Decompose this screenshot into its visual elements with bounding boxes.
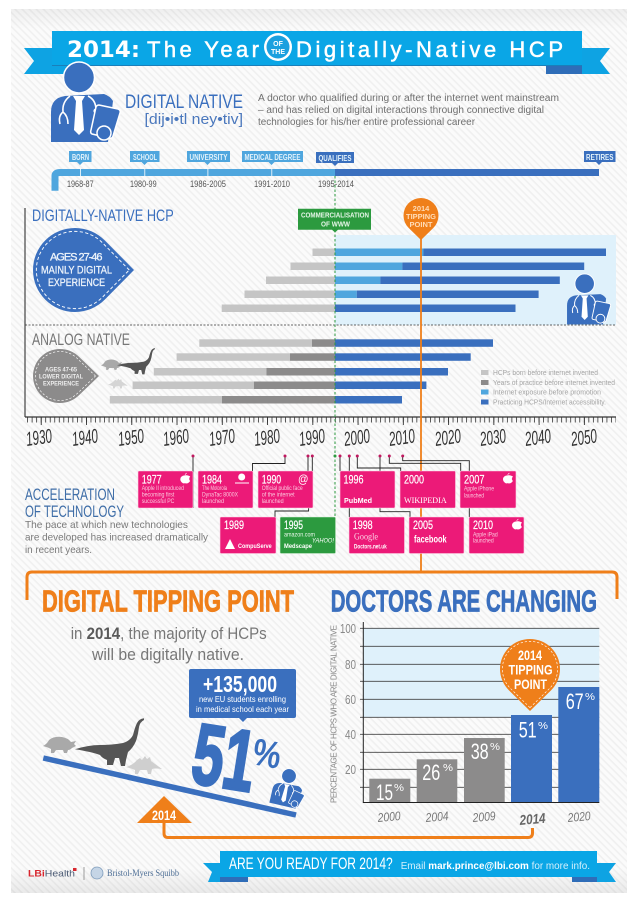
fulcrum: 2014: 2014 <box>152 807 176 823</box>
bar values: 51 <box>519 718 537 743</box>
heading: digitally-native hcp: DIGITALLY-NATIVE HCP <box>32 207 174 225</box>
card: 1984: The Motorola <box>202 485 227 492</box>
bar values: % <box>490 742 500 753</box>
x axis years: 2004 <box>424 809 449 825</box>
card: 2005 <box>409 517 464 554</box>
pin: ages 27-46 <box>33 228 134 312</box>
card: 2007: Apple iPhone <box>464 486 494 493</box>
axis year labels: 1970 <box>208 426 236 451</box>
timeline label: born <box>69 151 92 165</box>
timeline label: school <box>130 151 160 165</box>
card: 1977: successful PC <box>142 498 175 505</box>
callout: +135,000 students: new EU students enrolling <box>199 694 286 704</box>
card: 2007: launched <box>464 492 484 499</box>
axis year labels: 1950 <box>117 426 145 451</box>
card: 2000: 2000 <box>404 472 424 486</box>
heading: digital tipping point: DIGITAL TIPPING POINT <box>42 584 294 619</box>
callout: +135,000 students <box>189 669 296 722</box>
card: 1977: 1977 <box>142 472 162 486</box>
axis year labels: 2010 <box>387 426 416 451</box>
x axis years: 2020 <box>566 809 591 825</box>
card: 2010: launched <box>473 537 494 544</box>
pin: 2014 tipping point <box>404 198 439 240</box>
x axis years: 2014 <box>518 810 546 828</box>
timeline label: born: BORN <box>72 153 89 162</box>
technology timeline dots <box>192 454 404 458</box>
bar values: 67 <box>566 689 584 714</box>
callout: +135,000 students: +135,000 <box>203 671 277 697</box>
card: 1984: 1984 <box>202 472 222 486</box>
card: 1984: DynaTac 8000X <box>202 492 239 498</box>
pin: ages 27-46: AGES 27-46 <box>50 252 102 264</box>
card: 1998: Google <box>354 531 378 541</box>
orange frame <box>27 572 617 838</box>
card: 1990: @ <box>298 472 308 486</box>
pin: 2014 tipping point: TIPPING <box>406 212 436 221</box>
pin: ages 47-65: EXPERIENCE <box>43 381 80 388</box>
x axis years: 2009 <box>471 809 496 825</box>
card: 2010: Apple iPad <box>473 532 498 539</box>
pin: ages 27-46: MAINLY DIGITAL <box>41 264 112 276</box>
timeline label: school: SCHOOL <box>133 153 157 162</box>
digital native stacked bars <box>222 248 606 312</box>
card: 1995: amazon.com <box>284 532 315 539</box>
ribbon question: ARE YOU READY FOR 2014? <box>229 854 393 873</box>
axis year labels: 1930 <box>25 426 53 451</box>
bar values: 38 <box>471 739 489 764</box>
card: 1996: PubMed <box>344 498 372 505</box>
card: 1995 <box>280 517 336 554</box>
y axis values: 60 <box>345 692 356 707</box>
card: 1984 <box>198 471 253 508</box>
career timeline <box>55 151 616 191</box>
bar values: % <box>585 692 595 703</box>
icon: apple <box>503 473 513 483</box>
acceleration description: The pace at which new technologies <box>25 519 188 531</box>
card: 1998: 1998 <box>353 518 373 532</box>
logo: Bristol-Myers Squibb <box>91 867 179 879</box>
axis year labels: 1960 <box>162 426 190 451</box>
card: 1990: Official public face <box>262 485 303 492</box>
pin: ages 47-65: LOWER DIGITAL <box>39 374 83 381</box>
label: commercialisation of www: OF WWW <box>321 220 351 229</box>
timeline label: university <box>187 151 230 165</box>
card: 1995: YAHOO! <box>312 539 334 545</box>
x axis years <box>376 809 591 828</box>
card: 2005: 2005 <box>413 518 433 532</box>
icon: doctor on seesaw <box>269 766 310 810</box>
timeline label: medical degree <box>242 151 303 165</box>
icon: apple <box>180 473 190 483</box>
pin: ages 47-65 <box>33 349 99 403</box>
icon: compuserve <box>225 539 235 549</box>
timeline years: 1980-99 <box>130 179 157 189</box>
pin: chart 2014 tipping point <box>500 639 560 711</box>
axis year labels: 1940 <box>71 426 99 451</box>
definition text: technologies for his/her entire professional career <box>258 117 476 128</box>
legend: Internet exposure before promotion <box>493 388 601 396</box>
card: 1977: becoming first <box>142 492 175 498</box>
card: 2010 <box>469 517 524 554</box>
bar values: % <box>443 763 453 774</box>
acceleration description: are developed has increased dramatically <box>25 532 209 544</box>
icon: doctor with tablet <box>51 62 120 142</box>
card: 2007: 2007 <box>464 472 485 486</box>
acceleration description: in recent years. <box>25 544 92 556</box>
pronunciation: [dij•i•tl ney•tiv] <box>144 111 243 128</box>
pin: chart 2014 tipping point: 2014 <box>518 647 542 663</box>
definition text <box>258 93 559 128</box>
bars <box>369 687 599 802</box>
definition text: – and has relied on digital interactions through connective digital <box>258 105 544 116</box>
timeline label: retires <box>584 151 616 165</box>
y axis values: 100 <box>340 621 356 636</box>
card: 1998: Doctors.net.uk <box>354 545 387 551</box>
timeline years: 1991-2010 <box>254 179 290 189</box>
icon: motorola <box>235 474 249 484</box>
timeline years: 1986-2005 <box>190 179 226 189</box>
tipping point statement: will be digitally native. <box>91 645 244 664</box>
icon: doctor on digital panel <box>567 274 611 324</box>
big 51 percent: % <box>249 732 284 778</box>
axis year labels: 2050 <box>569 426 598 451</box>
card: 1998 <box>349 517 404 554</box>
timeline years: 1995-2014 <box>318 179 354 189</box>
heading: analog native: ANALOG NATIVE <box>32 331 130 349</box>
y axis values: 80 <box>345 657 356 672</box>
card: 1990: of the internet <box>262 492 295 498</box>
axis year labels: 2020 <box>433 426 462 451</box>
card: 1995: Medscape <box>284 543 312 550</box>
grid lines <box>360 628 599 787</box>
axis year labels <box>25 426 598 451</box>
tipping point statement <box>71 624 267 664</box>
dinosaurs on seesaw <box>43 718 162 774</box>
tipping point statement: in 2014, the majority of HCPs <box>71 624 267 643</box>
label: commercialisation of www <box>298 209 371 232</box>
title ribbon <box>24 31 610 74</box>
pin: chart 2014 tipping point: POINT <box>514 676 547 692</box>
card: 2000: WIKIPEDIA <box>404 496 447 505</box>
label: commercialisation of www: COMMERCIALISATION <box>301 210 369 219</box>
card: 2007 <box>460 471 516 508</box>
axis year labels: 2040 <box>523 426 552 451</box>
fulcrum: 2014 <box>137 796 192 823</box>
timeline label: medical degree: MEDICAL DEGREE <box>244 153 301 162</box>
logo: Bristol-Myers Squibb: Bristol-Myers Squibb <box>107 869 179 879</box>
card: 1989: 1989 <box>224 518 244 532</box>
analog native stacked bars <box>110 339 493 404</box>
x axis years: 2000 <box>376 809 401 825</box>
bar values <box>376 689 595 805</box>
pin: 2014 tipping point: POINT <box>410 220 433 229</box>
card: 1977 <box>138 471 193 508</box>
heading: acceleration of technology <box>25 485 124 521</box>
ribbon contact: Email mark.prince@lbi.com for more info. <box>401 861 590 872</box>
pin: chart 2014 tipping point: TIPPING <box>508 662 553 678</box>
card: 1989 <box>220 517 276 554</box>
timeline years: 1968-87 <box>67 179 94 189</box>
axis year labels: 1980 <box>253 426 281 451</box>
heading: digital native: DIGITAL NATIVE <box>125 91 243 113</box>
card: 1996 <box>340 471 395 508</box>
heading: acceleration of technology: OF TECHNOLOGY <box>25 502 124 521</box>
card: 1989: CompuServe <box>238 544 272 550</box>
chart axes <box>0 208 616 421</box>
y axis values: 40 <box>345 727 356 742</box>
pin: ages 47-65: AGES 47-65 <box>45 367 77 374</box>
y axis values: 20 <box>345 762 356 777</box>
logo: LBi Health: LBiHealth <box>28 868 75 880</box>
card: 1984: launched <box>202 498 224 505</box>
definition text: A doctor who qualified during or after the internet went mainstream <box>258 93 559 104</box>
orange tipping point line <box>420 238 422 572</box>
axis year labels: 2000 <box>342 426 371 451</box>
www dashed line <box>334 176 336 517</box>
light blue digital era panel <box>335 235 616 325</box>
title text: 2014: 2014: <box>67 38 140 63</box>
timeline label: university: UNIVERSITY <box>190 153 228 162</box>
title text: Digitally-Native HCP: Digitally-Native HCP <box>296 37 563 62</box>
legend <box>481 368 615 406</box>
callout: +135,000 students: in medical school each year <box>196 704 289 714</box>
title text: The Year: The Year <box>147 37 259 62</box>
legend: HCPs born before internet invented <box>493 368 598 377</box>
bar values: % <box>538 721 548 732</box>
timeline label: qualifies <box>316 152 354 166</box>
acceleration description <box>25 519 209 556</box>
card: 2000 <box>400 471 456 508</box>
heading: acceleration of technology: ACCELERATION <box>25 485 115 504</box>
legend: Practicing HCPS/Internet accessibility. <box>493 398 606 406</box>
timeline label: qualifies: QUALIFIES <box>318 154 352 163</box>
card: 1995: 1995 <box>284 518 303 532</box>
card: 1990: 1990 <box>262 472 281 486</box>
timeline label: retires: RETIRES <box>586 153 614 162</box>
y axis title: PERCENTAGE OF HCPS WHO ARE DIGITAL NATIVE <box>330 625 338 803</box>
legend: Years of practice before internet invented <box>493 378 615 387</box>
card: 2005: facebook <box>414 535 447 546</box>
big 51 percent: 51 <box>186 706 262 810</box>
card: 2010: 2010 <box>473 518 493 532</box>
card: 1990 <box>258 471 313 508</box>
bar values: 26 <box>422 760 440 785</box>
axis year labels: 1990 <box>298 426 326 451</box>
of the badge: THE <box>271 49 285 56</box>
card: 1990: launched <box>262 498 284 505</box>
small dinosaurs <box>101 348 155 388</box>
timeline years <box>67 179 354 189</box>
bar values: % <box>394 783 404 794</box>
seesaw beam <box>43 758 296 815</box>
of the badge: OF <box>273 41 284 48</box>
of the badge <box>264 33 292 61</box>
bottom ribbon <box>203 851 616 882</box>
technology connector lines <box>193 456 469 517</box>
bar values: 15 <box>376 780 393 805</box>
card: 1977: Apple II introduced <box>142 485 184 492</box>
bar chart: doctors are changing <box>330 621 599 828</box>
card: 1996: 1996 <box>344 472 364 486</box>
pin: ages 27-46: EXPERIENCE <box>48 277 105 289</box>
pin: 2014 tipping point: 2014 <box>413 204 430 213</box>
y axis values <box>340 621 356 777</box>
icon: apple <box>512 519 522 529</box>
axis year labels: 2030 <box>478 426 507 451</box>
